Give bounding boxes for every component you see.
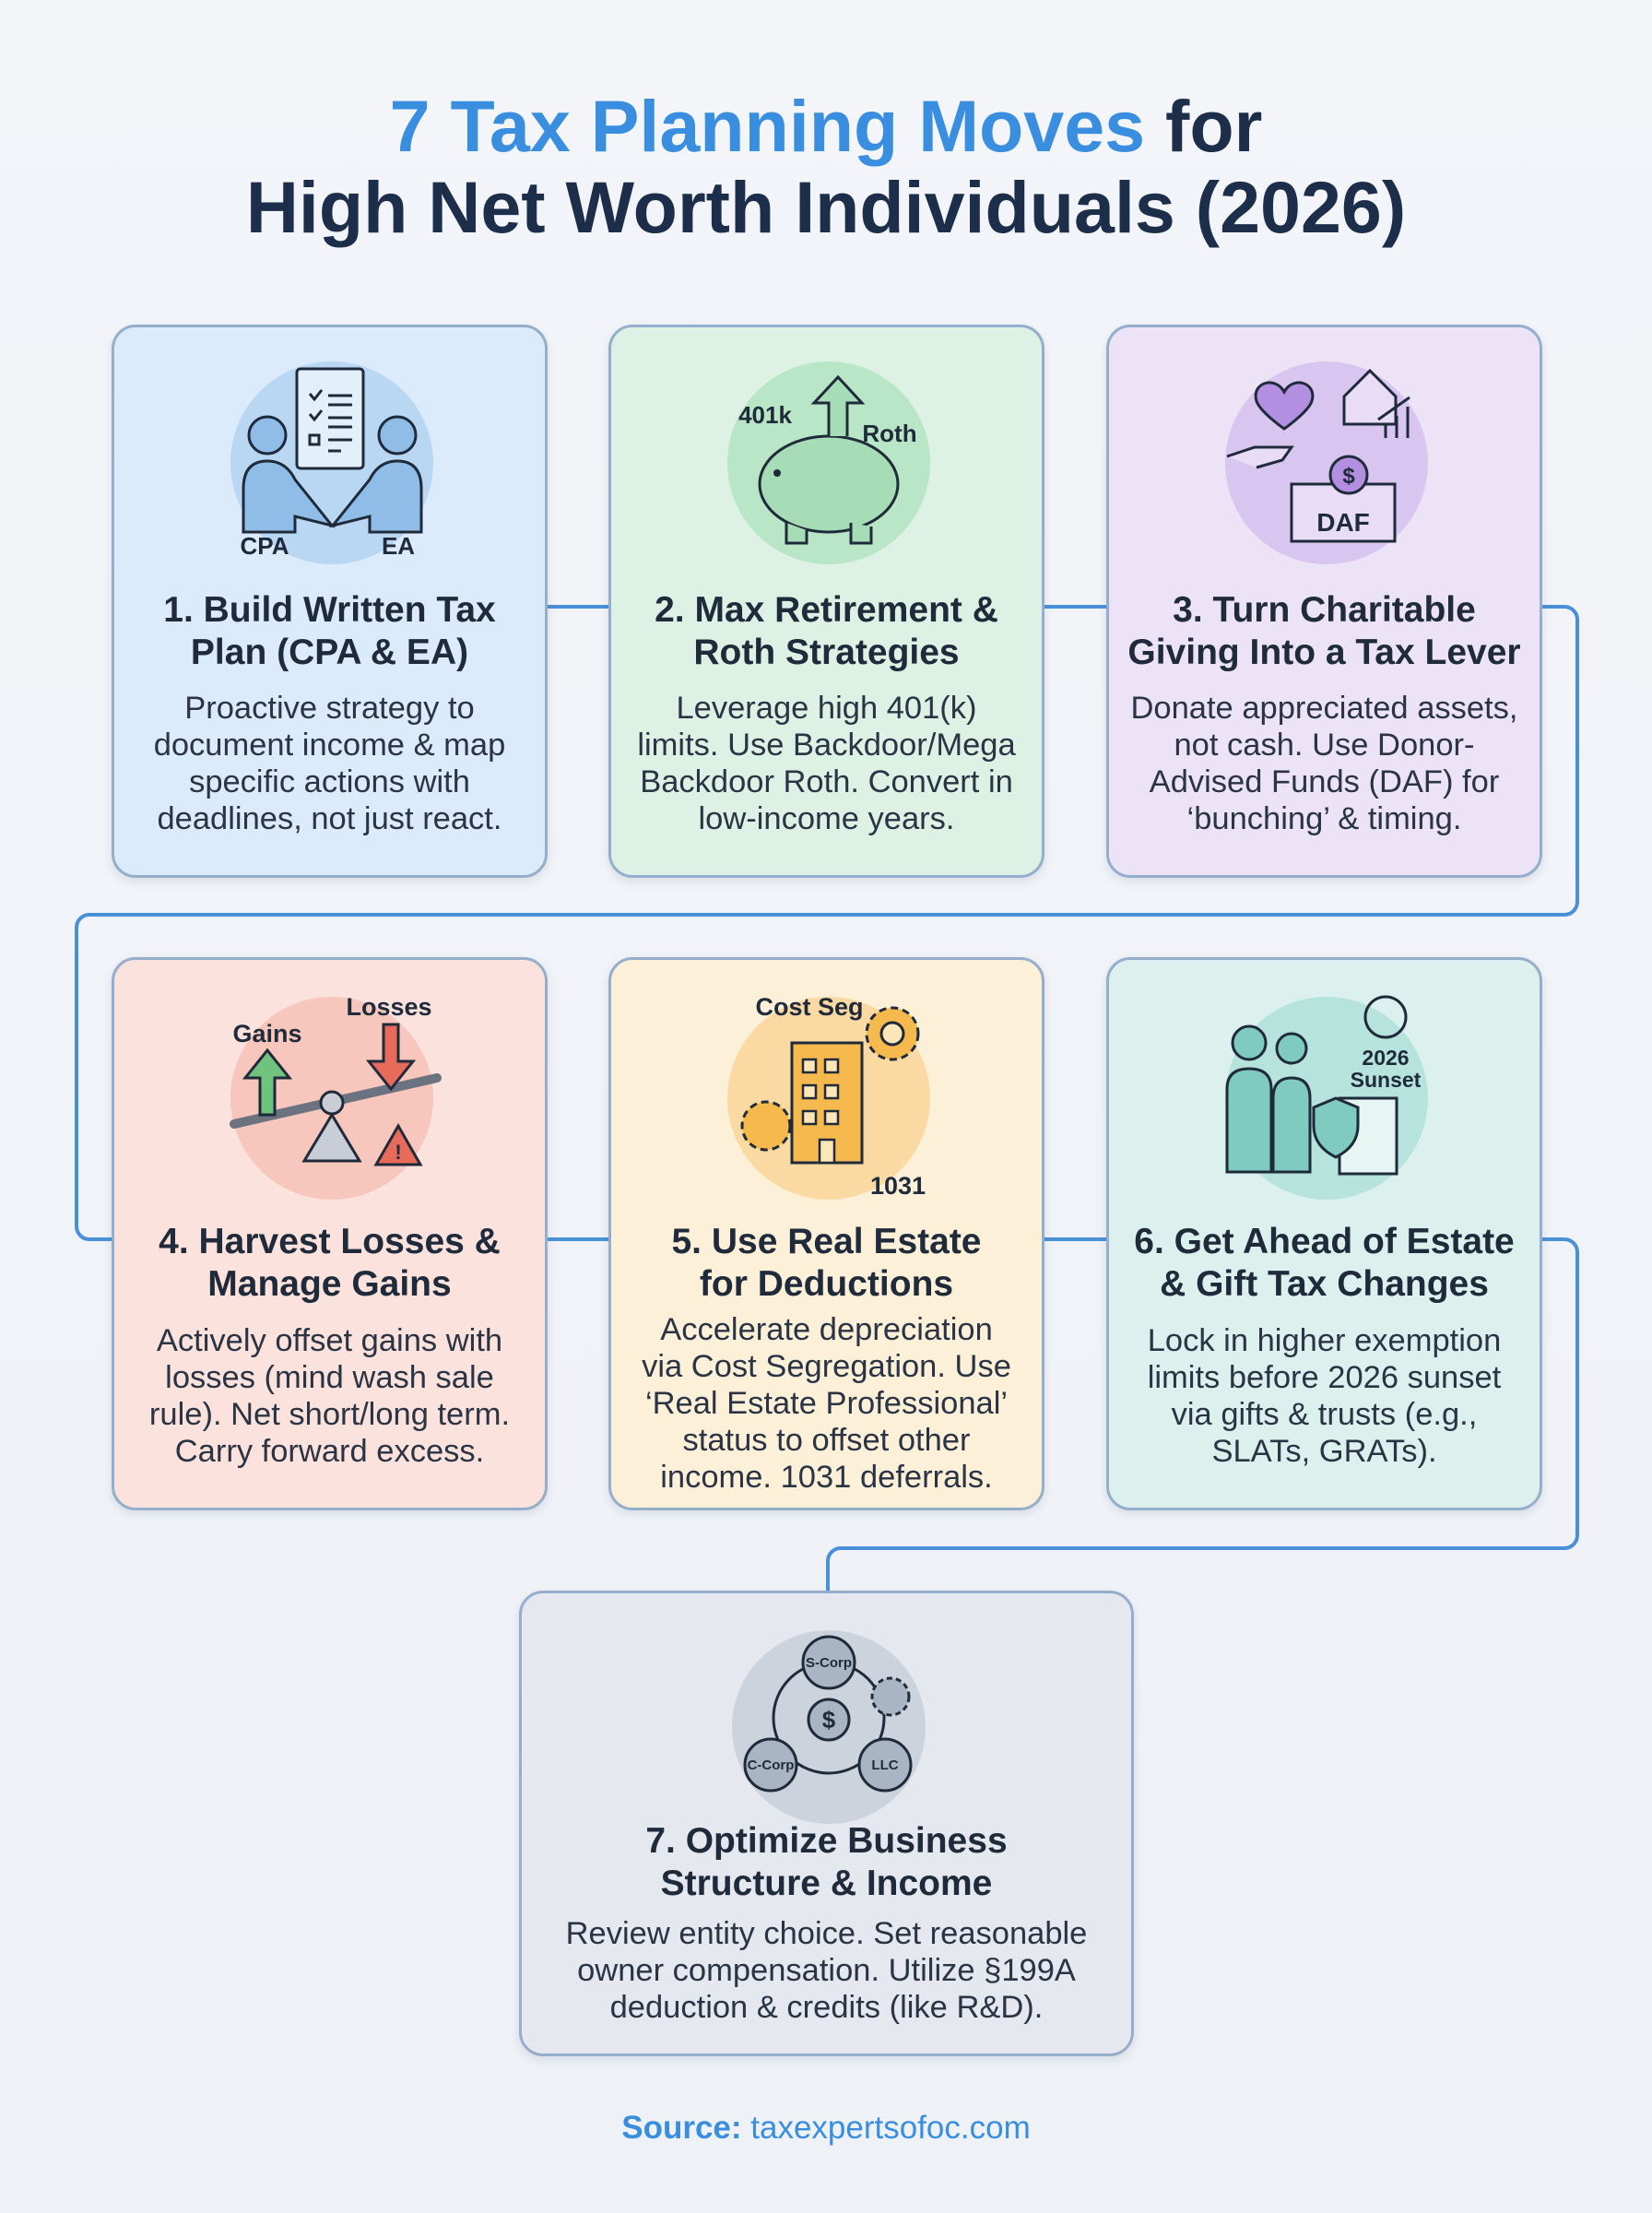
heading: Structure & Income bbox=[661, 1864, 992, 1903]
body text bbox=[149, 1323, 510, 1469]
icon: scale gains losses: ! bbox=[395, 1141, 402, 1164]
icon: donation box DAF bbox=[1225, 361, 1428, 564]
body text: via gifts & trusts (e.g., bbox=[1172, 1397, 1477, 1432]
body text: income. 1031 deferrals. bbox=[660, 1460, 993, 1495]
heading: Manage Gains bbox=[207, 1264, 452, 1304]
body text: deduction & credits (like R&D). bbox=[610, 1990, 1043, 2025]
icon: family with shield: Sunset bbox=[1351, 1068, 1422, 1092]
heading: 7. Optimize Business bbox=[645, 1821, 1008, 1861]
icon: entity diagram bbox=[732, 1630, 926, 1824]
body text: low-income years. bbox=[698, 801, 955, 836]
icon: family with shield bbox=[1225, 996, 1428, 1200]
heading: 3. Turn Charitable bbox=[1173, 590, 1476, 630]
body text: SLATs, GRATs). bbox=[1211, 1434, 1437, 1469]
body text bbox=[1148, 1323, 1501, 1469]
icon: scale gains losses: Gains bbox=[232, 1020, 302, 1047]
icon: entity diagram: LLC bbox=[871, 1757, 899, 1773]
body text: limits. Use Backdoor/Mega bbox=[637, 728, 1016, 763]
heading: Roth Strategies bbox=[693, 633, 960, 672]
icon: handshake with checklist: CPA bbox=[241, 532, 289, 560]
heading: 5. Use Real Estate bbox=[671, 1222, 981, 1261]
body text: not cash. Use Donor- bbox=[1174, 728, 1474, 763]
body text: specific actions with bbox=[189, 764, 470, 799]
body text: document income & map bbox=[154, 728, 505, 763]
heading bbox=[163, 590, 496, 672]
panel: 2 retirement bbox=[608, 325, 1044, 878]
icon: scale gains losses bbox=[230, 993, 442, 1200]
body text: Donate appreciated assets, bbox=[1130, 691, 1517, 726]
body text: Actively offset gains with bbox=[157, 1323, 502, 1358]
title bbox=[246, 85, 1406, 248]
body text: deadlines, not just react. bbox=[157, 801, 502, 836]
heading bbox=[671, 1222, 981, 1304]
panel: 7 business structure bbox=[519, 1591, 1134, 2056]
heading: & Gift Tax Changes bbox=[1160, 1264, 1489, 1304]
body text: Proactive strategy to bbox=[184, 691, 475, 726]
icon: handshake with checklist bbox=[230, 361, 433, 564]
heading: Plan (CPA & EA) bbox=[191, 633, 468, 672]
heading: 4. Harvest Losses & bbox=[159, 1222, 501, 1261]
panel: 4 harvest losses bbox=[112, 957, 548, 1510]
body text: Carry forward excess. bbox=[175, 1434, 484, 1469]
heading: 6. Get Ahead of Estate bbox=[1134, 1222, 1515, 1261]
icon: piggy bank: 401k bbox=[738, 401, 792, 429]
body text: status to offset other bbox=[683, 1423, 970, 1458]
body text: Backdoor Roth. Convert in bbox=[640, 764, 1013, 799]
icon: donation box DAF: DAF bbox=[1316, 508, 1370, 537]
heading: 1. Build Written Tax bbox=[163, 590, 496, 630]
body text bbox=[154, 691, 505, 836]
heading bbox=[159, 1222, 501, 1304]
heading bbox=[655, 590, 998, 672]
title: 7 Tax Planning Moves for bbox=[390, 85, 1262, 167]
icon: building with gears bbox=[727, 993, 930, 1200]
icon: piggy bank bbox=[727, 361, 930, 564]
body text bbox=[642, 1312, 1011, 1495]
body text bbox=[566, 1916, 1087, 2025]
icon: building with gears: 1031 bbox=[870, 1172, 926, 1200]
icon: building with gears: Cost Seg bbox=[755, 993, 864, 1021]
body text bbox=[1130, 691, 1517, 836]
body text: via Cost Segregation. Use bbox=[642, 1349, 1011, 1384]
panel: 5 real estate bbox=[608, 957, 1044, 1510]
panel: 6 estate gift bbox=[1106, 957, 1542, 1510]
heading bbox=[1134, 1222, 1515, 1304]
icon: entity diagram: C-Corp bbox=[748, 1757, 794, 1773]
body text: Advised Funds (DAF) for bbox=[1150, 764, 1499, 799]
body text: Leverage high 401(k) bbox=[676, 691, 977, 726]
body text: limits before 2026 sunset bbox=[1148, 1360, 1501, 1395]
icon: scale gains losses: Losses bbox=[346, 993, 432, 1021]
body text bbox=[637, 691, 1016, 836]
body text: ‘Real Estate Professional’ bbox=[645, 1386, 1008, 1421]
heading: for Deductions bbox=[700, 1264, 953, 1304]
icon: family with shield: 2026 bbox=[1362, 1046, 1410, 1070]
panel: 3 charitable giving bbox=[1106, 325, 1542, 878]
icon: piggy bank: Roth bbox=[862, 420, 917, 447]
body text: Review entity choice. Set reasonable bbox=[566, 1916, 1087, 1951]
heading: 2. Max Retirement & bbox=[655, 590, 998, 630]
icon: entity diagram: $ bbox=[822, 1706, 836, 1734]
title: High Net Worth Individuals (2026) bbox=[246, 166, 1406, 248]
heading bbox=[645, 1821, 1008, 1903]
heading bbox=[1127, 590, 1521, 672]
body text: rule). Net short/long term. bbox=[149, 1397, 510, 1432]
icon: entity diagram: S-Corp bbox=[806, 1655, 852, 1671]
heading: Giving Into a Tax Lever bbox=[1127, 633, 1521, 672]
body text: ‘bunching’ & timing. bbox=[1187, 801, 1461, 836]
icon: handshake with checklist: EA bbox=[382, 532, 415, 560]
body text: owner compensation. Utilize §199A bbox=[577, 1953, 1076, 1988]
panel: 1 written tax plan bbox=[112, 325, 548, 878]
body text: losses (mind wash sale bbox=[165, 1360, 494, 1395]
icon: donation box DAF: $ bbox=[1342, 464, 1355, 489]
body text: Lock in higher exemption bbox=[1148, 1323, 1501, 1358]
body text: Accelerate depreciation bbox=[660, 1312, 993, 1347]
source footer: Source: taxexpertsofoc.com bbox=[621, 2110, 1031, 2146]
